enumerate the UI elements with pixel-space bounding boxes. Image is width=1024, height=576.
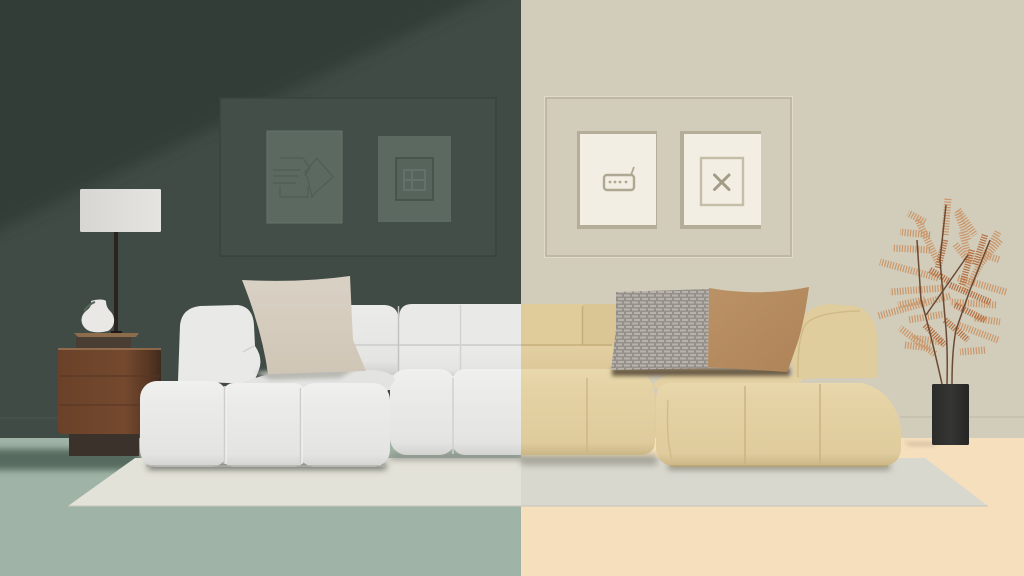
tan pillow: [708, 287, 809, 372]
potted plant: [878, 198, 1006, 446]
lamp shade: [80, 189, 161, 232]
left arm white: [178, 305, 260, 384]
book stack: [76, 337, 131, 348]
pillow shadow yellow: [612, 368, 790, 376]
table body: [58, 348, 161, 434]
icon: arrow sketch: [273, 158, 333, 197]
frame: router artwork: [577, 131, 657, 229]
back cushions yellow: [521, 304, 625, 376]
icon: router: [604, 167, 634, 190]
sofa base white: [345, 320, 521, 390]
white sofa half: [140, 276, 532, 467]
left chaise white: [140, 370, 395, 467]
right floor: [521, 438, 1024, 576]
pillow shadow white: [255, 366, 360, 380]
plant shadow: [903, 442, 935, 446]
center seat yellow: [521, 369, 655, 455]
left wall: [0, 0, 472, 418]
black pot: [932, 384, 969, 445]
dense orange foliage: [925, 235, 990, 345]
wall moulding right: [544, 96, 792, 258]
back cushions white: [340, 304, 521, 376]
icon: dim inner square: [396, 158, 433, 200]
side table: [58, 300, 161, 456]
left floor: [0, 438, 521, 576]
waffle pillow: [611, 289, 709, 370]
right wall: [521, 0, 1024, 438]
center seat white: [390, 369, 532, 455]
icon: X in square: [701, 158, 743, 205]
table lamp: [80, 189, 161, 332]
right chaise yellow: [652, 369, 901, 466]
left wall panel: frames: [220, 98, 496, 256]
lamp stem: [114, 231, 118, 331]
plant stems: [917, 205, 990, 384]
rug: [68, 458, 988, 506]
yellow sofa half: [521, 287, 901, 466]
wall moulding left: [220, 98, 496, 256]
beige pillow: [242, 276, 366, 374]
frame: arrow artwork: [267, 131, 342, 223]
vase: [82, 300, 114, 332]
frame: square artwork: [378, 136, 451, 222]
table base: [69, 433, 139, 456]
frame: X artwork: [680, 131, 761, 229]
right wall panel: frames: [544, 96, 792, 258]
plant leaves: [878, 198, 1006, 354]
sofa shadow: [148, 454, 890, 469]
right arm yellow: [792, 304, 877, 380]
